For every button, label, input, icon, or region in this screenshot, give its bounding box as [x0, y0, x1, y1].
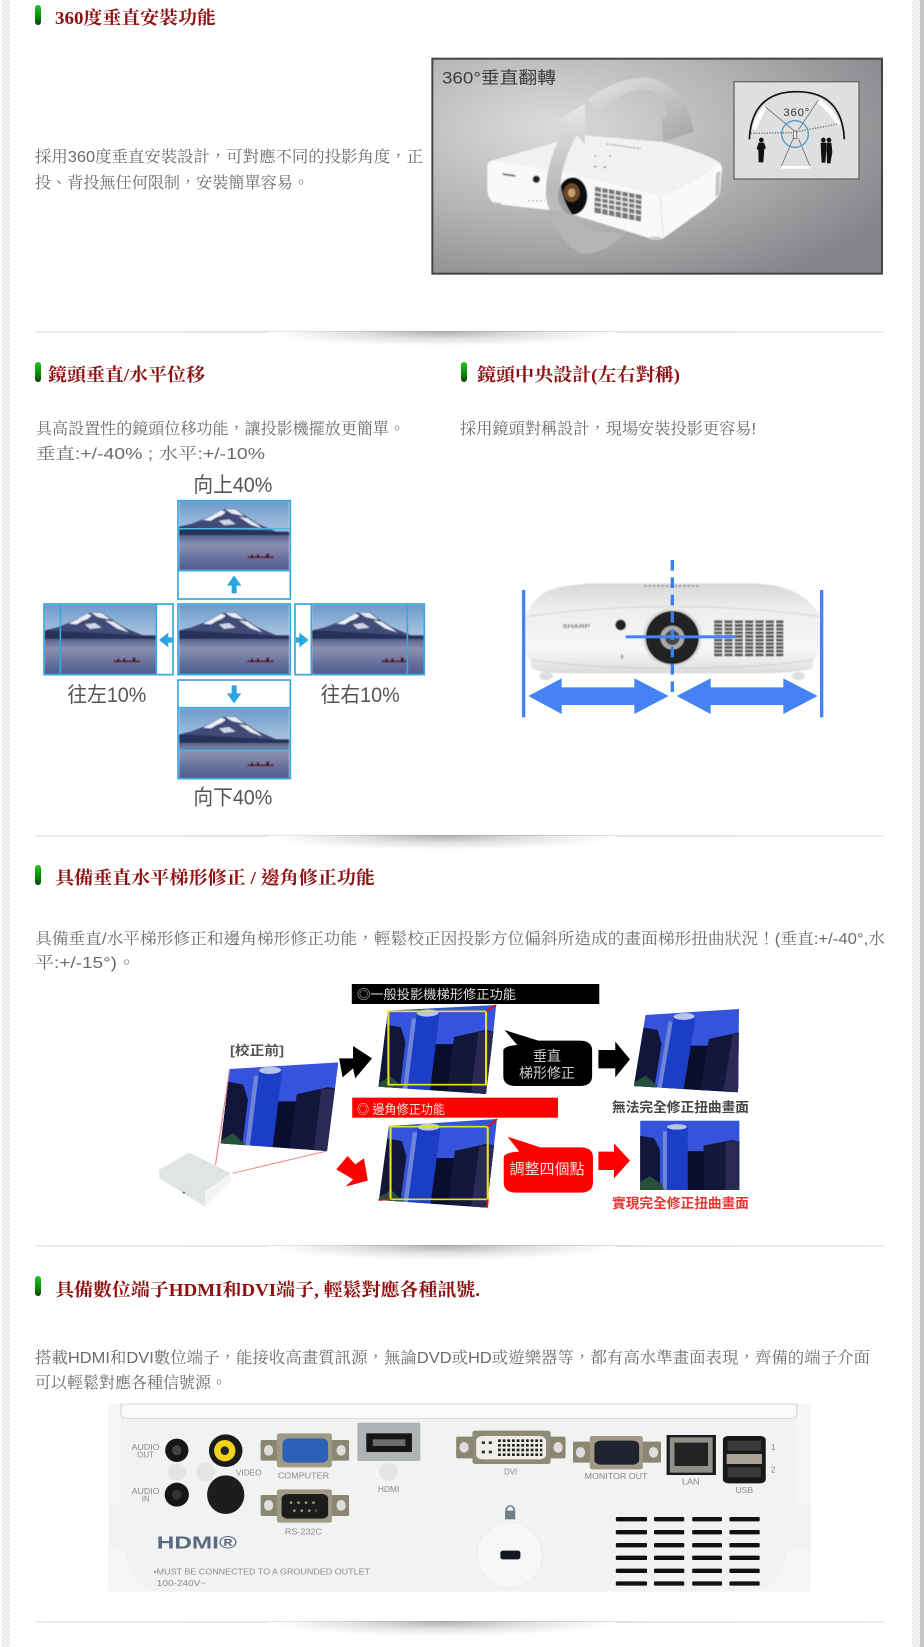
diagram: keystone correction comparison — [159, 984, 752, 1211]
icon: front projector: SHARP — [562, 624, 591, 630]
icon: DVI port: DVI — [504, 1467, 517, 1477]
label: down 40%: 向下40% — [193, 786, 272, 809]
label: 360 rotation title: 360°垂直翻轉 — [442, 68, 556, 87]
heading: lens shift: 鏡頭垂直/水平位移 — [48, 365, 205, 385]
label: corner correction title text: ◎ 邊角修正功能 — [357, 1102, 445, 1117]
image: uncorrected result — [634, 1009, 739, 1092]
arrow: rear arc — [587, 77, 693, 142]
heading: 360 degree installation: 360度垂直安裝功能 — [55, 7, 216, 28]
icon: front projector — [526, 583, 820, 680]
text block: digital terminals description: 可以輕鬆對應各種信號源。 — [35, 1374, 227, 1392]
image: fully corrected result — [640, 1121, 739, 1190]
icon: HDMI port — [357, 1423, 420, 1494]
text block: 360 degree description: 採用360度垂直安裝設計，可對應不同的投影角度，正 — [35, 148, 423, 166]
icon: HDMI port: HDMI — [378, 1485, 399, 1494]
text block: lens shift description: 具高設置性的鏡頭位移功能，讓投影機擺放更簡單。 — [36, 419, 405, 438]
label: up 40%: 向上40% — [193, 474, 272, 497]
text block: keystone description: 平:+/-15°)。 — [35, 954, 136, 972]
label: cannot fully correct: 無法完全修正扭曲畫面 — [612, 1099, 749, 1115]
heading: digital terminals: 具備數位端子HDMI和DVI端子, 輕鬆對應各種訊號. — [55, 1279, 480, 1300]
panel: 360 degree rotation image — [432, 59, 882, 274]
panel: shift down — [178, 680, 290, 779]
icon: audio jacks: OUT — [137, 1450, 154, 1460]
label: general keystone title text: ◎一般投影機梯形修正功能 — [357, 987, 516, 1002]
image: vertical keystone source — [377, 1005, 497, 1094]
panel: 360 angle inset — [734, 82, 859, 179]
diagram: lens shift directions — [44, 474, 424, 809]
icon: audio jacks: AUDIO — [132, 1487, 160, 1496]
text block: digital terminals description: 搭載HDMI和DVI數位端子，能接收高畫質訊源，無論DVD或HD或遊樂器等，都有高水準畫面表現，齊備的端子介面 — [35, 1348, 870, 1367]
icon: video jack: VIDEO — [236, 1468, 262, 1478]
panel: shift right — [295, 604, 424, 675]
arrow: width markers and centre lines — [522, 560, 823, 717]
panel: projector rear terminals — [108, 1404, 811, 1592]
label: fully corrected: 實現完全修正扭曲畫面 — [612, 1195, 749, 1211]
arrow: front rising arc — [546, 103, 627, 254]
text block: keystone description — [35, 930, 885, 972]
label: vertical keystone bubble text: 梯形修正 — [519, 1065, 575, 1081]
icon: DVI port — [456, 1431, 566, 1477]
icon: projector — [487, 136, 722, 240]
arrow: red result — [598, 1143, 630, 1178]
text block: keystone description: 具備垂直/水平梯形修正和邊角梯形修正功能，輕鬆校正因投影方位偏斜所造成的畫面梯形扭曲狀況！(垂直:+/-40°,水 — [35, 930, 885, 948]
label: adjust four points bubble text: 調整四個點 — [509, 1161, 585, 1178]
marks: red corner adjustments — [378, 1005, 497, 1208]
text block: digital terminals description — [35, 1348, 870, 1392]
icon: USB ports — [723, 1436, 776, 1495]
image: corner correction source — [378, 1119, 498, 1208]
icon: vent slots — [616, 1517, 760, 1586]
label: vertical keystone bubble text: 垂直 — [533, 1048, 561, 1064]
callout: red bubble — [504, 1137, 593, 1193]
icon: audio jacks — [132, 1439, 189, 1507]
icon: audio jacks: IN — [142, 1494, 149, 1504]
text block: power note: 100-240V~ — [157, 1579, 206, 1588]
logo: HDMI: HDMI® — [157, 1532, 237, 1552]
icon: small projector with projection rays — [159, 1069, 327, 1207]
panel: shift left — [44, 604, 173, 675]
panel: centre position — [178, 604, 290, 675]
label: vertical keystone bubble text — [519, 1048, 575, 1081]
icon: video jack — [196, 1434, 262, 1514]
text block: lens shift description — [36, 419, 405, 463]
label: left 10%: 往左10% — [67, 684, 146, 707]
text block: power note: •MUST BE CONNECTED TO A GROUNDED OUTLET — [154, 1567, 371, 1577]
band: corner correction title — [352, 1098, 558, 1118]
panel: 360 angle inset: 360° — [783, 107, 809, 119]
panel: shift up — [178, 501, 290, 599]
image: before correction — [220, 1062, 340, 1151]
diagram: symmetric lens projector — [522, 560, 823, 717]
text block: 360 degree description: 投、背投無任何限制，安裝簡單容易。 — [35, 174, 309, 192]
text block: symmetric lens description: 採用鏡頭對稱設計，現場安裝投影更容易! — [460, 420, 756, 438]
heading: centred lens design: 鏡頭中央設計(左右對稱) — [477, 364, 680, 386]
icon: audio jacks: AUDIO — [132, 1443, 160, 1452]
arrow: red to corner — [336, 1156, 368, 1187]
text block: lens shift description: 垂直:+/-40% ; 水平:+/-10% — [36, 445, 265, 463]
icon: USB ports: 1 — [771, 1443, 776, 1452]
icon: monitor out port: MONITOR OUT — [585, 1472, 648, 1481]
icon: computer VGA port: COMPUTER — [278, 1471, 329, 1481]
arrow: black to keystone — [339, 1046, 372, 1078]
icon: security lock — [477, 1506, 542, 1588]
arrow: black result — [598, 1042, 630, 1077]
heading: keystone correction: 具備垂直水平梯形修正 / 邊角修正功能 — [55, 867, 375, 888]
band: general keystone title — [352, 984, 599, 1004]
callout: black bubble — [503, 1030, 592, 1086]
icon: two viewer silhouettes — [821, 138, 832, 163]
text block: 360 degree description — [35, 148, 423, 192]
frame: yellow guides — [388, 1011, 488, 1199]
icon: computer VGA port — [261, 1433, 349, 1481]
label: before correction: [校正前] — [230, 1043, 284, 1058]
icon: RS-232C port — [261, 1489, 349, 1537]
icon: RS-232C port: RS-232C — [285, 1527, 322, 1537]
label: right 10%: 往右10% — [321, 684, 400, 707]
icon: USB ports: USB — [735, 1486, 753, 1495]
icon: monitor out port — [573, 1436, 661, 1481]
icon: LAN port — [667, 1435, 716, 1487]
icon: LAN port: LAN — [682, 1477, 700, 1487]
icon: USB ports: 2 — [771, 1466, 776, 1475]
text block: power note — [154, 1567, 371, 1588]
icon: single viewer silhouette — [757, 138, 766, 162]
